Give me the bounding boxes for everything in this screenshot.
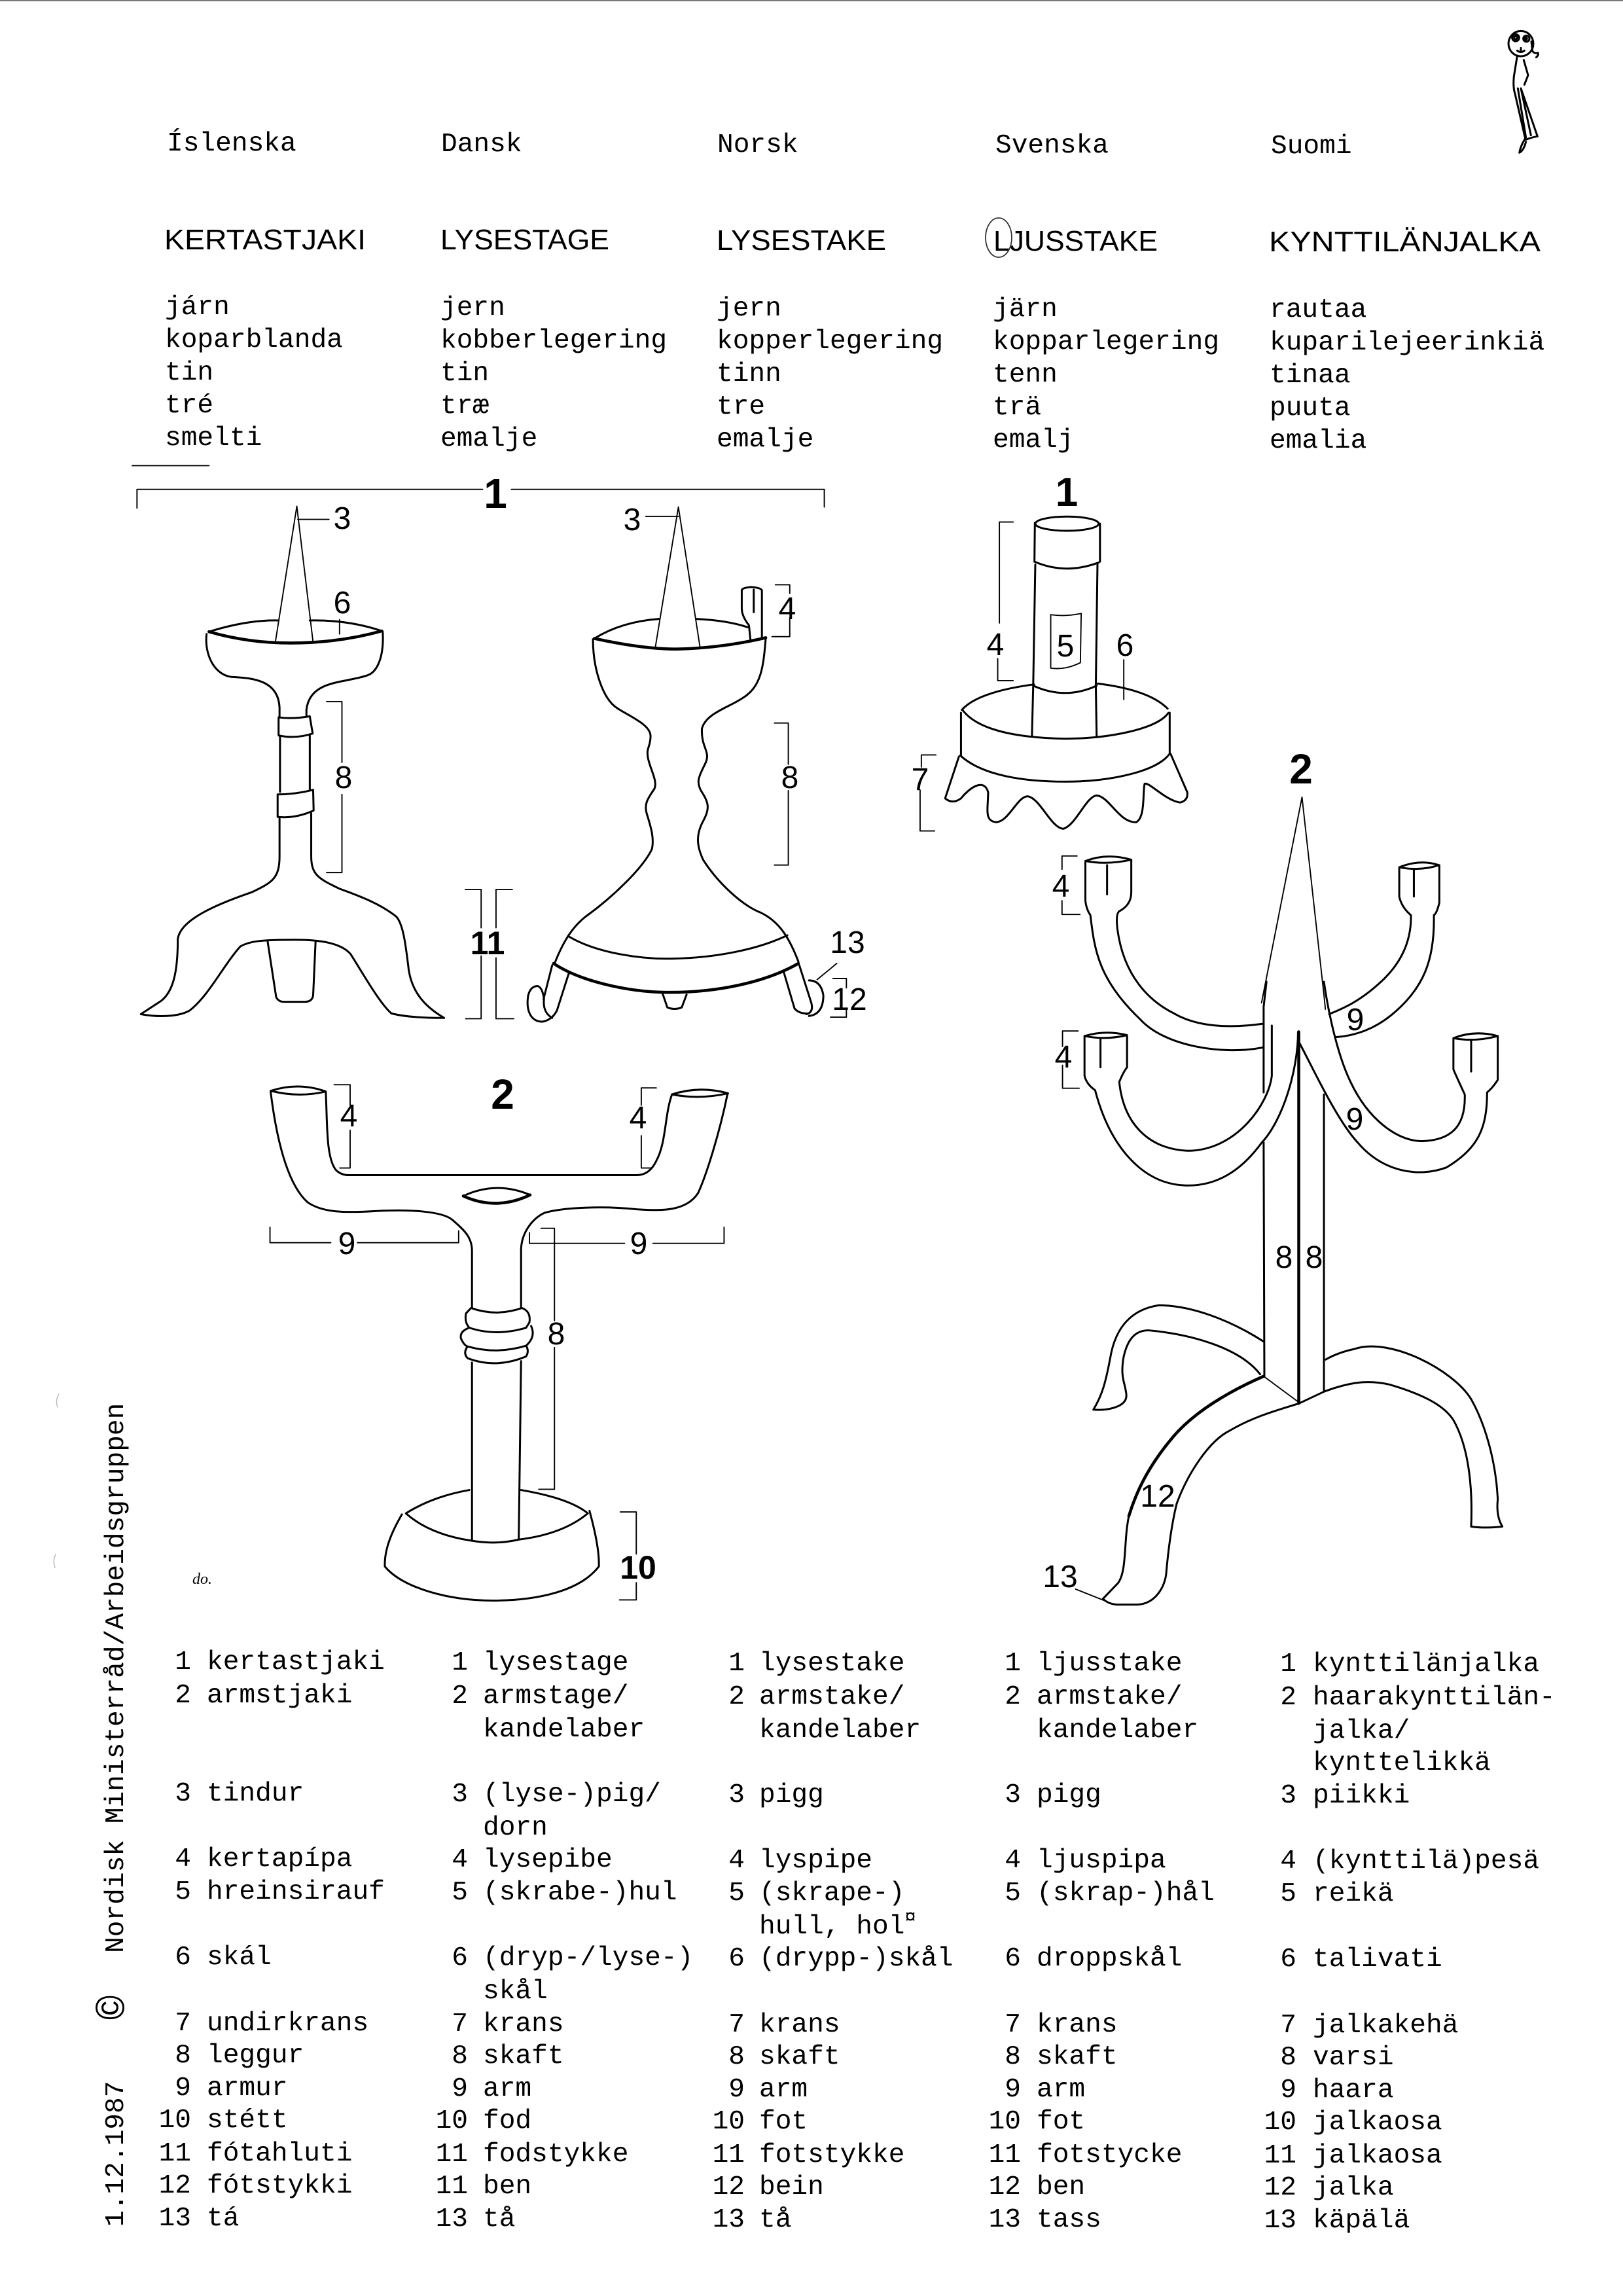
heading row: object names: LJUSSTAKE: [993, 225, 1158, 257]
glossary column: Norwegian: 10: [713, 2107, 745, 2137]
glossary column: Finnish: jalkaosa: [1313, 2108, 1442, 2138]
glossary column: Danish: skaft: [483, 2041, 564, 2072]
illustration: pricket candlesticks, figure 1 left: 3: [334, 501, 351, 536]
glossary column: Swedish: fot: [1037, 2107, 1085, 2137]
text block: materials Icelandic: koparblanda: [165, 325, 343, 355]
glossary column: Danish: lysepibe: [483, 1845, 613, 1875]
glossary column: Finnish: käpälä: [1313, 2206, 1410, 2236]
glossary column: Danish: (skrabe-)hul: [483, 1878, 677, 1908]
glossary column: Icelandic: 4: [175, 1844, 191, 1874]
heading row: object names: KERTASTJAKI: [164, 224, 366, 256]
glossary column: Norwegian: 3: [728, 1780, 745, 1810]
illustration: pricket candlestick with pipe, figure 1 middle: [527, 503, 867, 1022]
glossary column: Norwegian: arm: [759, 2075, 808, 2105]
glossary column: Finnish: 4: [1280, 1846, 1296, 1876]
glossary column: Finnish: 9: [1280, 2075, 1296, 2106]
glossary column: Finnish: 13: [1264, 2206, 1296, 2236]
glossary column: Icelandic: 2: [175, 1681, 191, 1711]
text block: materials Finnish: puuta: [1270, 393, 1351, 423]
glossary column: Finnish: 8: [1280, 2043, 1296, 2073]
text block: materials Finnish: kuparilejeerinkiä: [1270, 328, 1544, 358]
glossary column: Finnish: 11: [1264, 2141, 1296, 2171]
glossary column: Finnish: 12: [1264, 2173, 1296, 2203]
illustration: four-arm candelabrum, figure 2 right: 12: [1140, 1479, 1175, 1514]
vertical copyright note: [91, 1403, 137, 2227]
illustration: four-arm candelabrum, figure 2 right: 4: [1055, 1040, 1072, 1075]
glossary column: Swedish: (skrap-)hål: [1037, 1878, 1215, 1909]
glossary column: Finnish: jalka/: [1313, 1716, 1410, 1746]
glossary column: Finnish: varsi: [1313, 2043, 1394, 2073]
illustration: pricket candlesticks, figure 1 left: [132, 465, 825, 1018]
vertical copyright note: 1.12.1987: [101, 2081, 132, 2227]
text block: materials Danish: jern: [440, 293, 505, 323]
glossary column: Danish: 11: [436, 2172, 468, 2202]
glossary column: Danish: 10: [436, 2106, 468, 2136]
glossary column: Icelandic: [159, 1647, 385, 2234]
illustration: pricket candlestick with pipe, figure 1 middle: 13: [830, 925, 865, 960]
glossary column: Norwegian: ¤: [904, 1907, 916, 1929]
glossary column: Icelandic: fótstykki: [207, 2171, 352, 2201]
text block: materials Danish: tin: [440, 359, 489, 389]
text block: materials Danish: emalje: [440, 424, 537, 454]
text block: materials Norwegian: tinn: [717, 359, 781, 389]
illustration: pricket candlestick with pipe, figure 1 middle: 4: [779, 592, 796, 626]
text block: materials Swedish: tenn: [993, 360, 1058, 390]
glossary column: Danish: dorn: [483, 1813, 548, 1843]
illustration: four-arm candelabrum, figure 2 right: 8: [1275, 1240, 1293, 1275]
glossary column: Danish: fodstykke: [483, 2140, 628, 2170]
text block: materials Icelandic: smelti: [165, 423, 262, 454]
glossary column: Danish: 8: [452, 2041, 468, 2072]
heading row: language names: Norsk: [717, 130, 798, 160]
glossary column: Finnish: jalka: [1313, 2173, 1394, 2203]
glossary column: Icelandic: 12: [159, 2171, 191, 2201]
glossary column: Danish: fod: [483, 2106, 531, 2136]
glossary column: Norwegian: lyspipe: [759, 1846, 872, 1876]
glossary column: Danish: 1: [452, 1648, 468, 1678]
illustration: two-arm candelabrum, figure 2 left: 4: [630, 1101, 647, 1136]
glossary column: Danish: krans: [483, 2009, 564, 2039]
glossary column: Finnish: talivati: [1313, 1945, 1442, 1975]
illustration: two-arm candelabrum, figure 2 left: 10: [620, 1549, 656, 1586]
glossary column: Finnish: (kynttilä)pesä: [1313, 1846, 1539, 1876]
signature mark: do.: [192, 1571, 212, 1588]
glossary column: Finnish: 3: [1280, 1781, 1296, 1811]
glossary column: Norwegian: (skrape-): [759, 1878, 904, 1909]
glossary column: Swedish: tass: [1037, 2205, 1101, 2235]
glossary column: Finnish: 1: [1280, 1649, 1296, 1679]
glossary column: Swedish: ljuspipa: [1037, 1846, 1166, 1876]
illustration: pricket candlesticks, figure 1 left: 11: [471, 925, 505, 961]
glossary column: Finnish: haara: [1313, 2075, 1394, 2106]
illustration: socket candlestick, figure 1 right: 1: [1056, 470, 1078, 515]
heading row: object names: LYSESTAKE: [717, 224, 886, 257]
illustration: pricket candlesticks, figure 1 left: 8: [335, 761, 352, 795]
glossary column: Icelandic: 13: [159, 2204, 191, 2234]
heading row: object names: KYNTTILÄNJALKA: [1269, 226, 1541, 258]
glossary column: Danish: 4: [452, 1845, 468, 1875]
glossary column: Icelandic: kertastjaki: [207, 1647, 385, 1677]
glossary column: Danish: [436, 1648, 693, 2234]
glossary column: Swedish: fotstycke: [1037, 2140, 1182, 2170]
glossary column: Icelandic: hreinsirauf: [207, 1877, 385, 1907]
glossary column: Norwegian: 6: [728, 1944, 745, 1974]
glossary column: Icelandic: fótahluti: [207, 2139, 352, 2169]
illustration: socket candlestick, figure 1 right: 6: [1116, 628, 1133, 663]
icon: stick figure mascot: [1508, 31, 1538, 152]
glossary column: Swedish: 10: [989, 2107, 1021, 2137]
illustration: two-arm candelabrum, figure 2 left: [270, 1071, 728, 1600]
glossary column: Norwegian: fot: [759, 2107, 808, 2137]
glossary column: Finnish: kynttilänjalka: [1313, 1649, 1539, 1679]
heading row: language names: Íslenska: [167, 128, 296, 159]
glossary column: Swedish: skaft: [1037, 2042, 1118, 2072]
glossary column: Danish: 5: [452, 1878, 468, 1908]
glossary column: Icelandic: 11: [159, 2139, 191, 2169]
glossary column: Norwegian: 1: [728, 1649, 745, 1679]
glossary column: Norwegian: 4: [728, 1846, 745, 1876]
heading row: language names: Suomi: [1271, 132, 1352, 162]
glossary column: Icelandic: undirkrans: [207, 2009, 368, 2039]
illustration: two-arm candelabrum, figure 2 left: 9: [338, 1227, 355, 1261]
illustration: pricket candlesticks, figure 1 left: 1: [484, 470, 507, 517]
glossary column: Icelandic: 6: [175, 1943, 191, 1973]
glossary column: Norwegian: 2: [728, 1682, 745, 1712]
glossary column: Finnish: jalkaosa: [1313, 2141, 1442, 2171]
glossary column: Finnish: 7: [1280, 2011, 1296, 2041]
glossary column: Swedish: 3: [1005, 1780, 1021, 1810]
glossary column: Norwegian: kandelaber: [759, 1715, 921, 1746]
glossary column: Danish: 13: [436, 2204, 468, 2234]
glossary column: Icelandic: 9: [175, 2073, 191, 2104]
glossary column: Swedish: 2: [1005, 1682, 1021, 1712]
illustration: four-arm candelabrum, figure 2 right: 9: [1346, 1102, 1363, 1137]
illustration: four-arm candelabrum, figure 2 right: 4: [1052, 869, 1069, 904]
text block: materials Norwegian: kopperlegering: [717, 327, 943, 357]
glossary column: Finnish: piikki: [1313, 1781, 1410, 1811]
text block: materials Danish: kobberlegering: [440, 326, 667, 356]
glossary column: Finnish: jalkakehä: [1313, 2011, 1458, 2041]
illustration: two-arm candelabrum, figure 2 left: 4: [340, 1099, 357, 1134]
text block: materials Swedish: [993, 295, 1219, 456]
glossary column: Danish: kandelaber: [483, 1715, 645, 1745]
glossary column: Swedish: 5: [1005, 1878, 1021, 1909]
illustration: socket candlestick, figure 1 right: 5: [1057, 629, 1074, 664]
illustration: four-arm candelabrum, figure 2 right: 8: [1306, 1240, 1323, 1275]
glossary column: Danish: armstage/: [483, 1681, 628, 1712]
glossary column: Norwegian: 7: [728, 2010, 745, 2040]
glossary column: Swedish: 1: [1005, 1649, 1021, 1679]
text block: materials Icelandic: [165, 293, 343, 454]
text block: materials Finnish: [1270, 295, 1544, 456]
glossary column: Swedish: 7: [1005, 2010, 1021, 2040]
glossary column: Swedish: 12: [989, 2172, 1021, 2202]
glossary column: Finnish: 2: [1280, 1683, 1296, 1713]
glossary column: Swedish: armstake/: [1037, 1682, 1182, 1712]
text block: materials Swedish: järn: [993, 295, 1058, 325]
glossary column: Icelandic: kertapípa: [207, 1844, 352, 1874]
vertical copyright note: Nordisk Ministerråd/Arbeidsgruppen: [101, 1403, 132, 1953]
glossary column: Icelandic: stétt: [207, 2106, 288, 2136]
text block: materials Norwegian: [717, 294, 943, 455]
glossary column: Danish: 3: [452, 1780, 468, 1810]
glossary column: Icelandic: skál: [207, 1943, 272, 1973]
illustration: two-arm candelabrum, figure 2 left: 9: [630, 1227, 647, 1261]
glossary column: Danish: skål: [483, 1977, 548, 2007]
glossary column: Norwegian: fotstykke: [759, 2140, 904, 2170]
heading row: language names: Svenska: [995, 131, 1109, 161]
illustration: two-arm candelabrum, figure 2 left: 8: [548, 1317, 565, 1352]
glossary column: Swedish: 4: [1005, 1846, 1021, 1876]
illustration: pricket candlestick with pipe, figure 1 middle: 3: [624, 503, 641, 537]
illustration: socket candlestick, figure 1 right: 4: [987, 628, 1004, 662]
heading row: language names: [167, 128, 1352, 162]
glossary column: Norwegian: hull, hol: [759, 1912, 904, 1942]
glossary column: Swedish: arm: [1037, 2075, 1085, 2105]
glossary column: Finnish: reikä: [1313, 1879, 1394, 1909]
heading row: object names: LYSESTAGE: [440, 224, 609, 256]
glossary column: Icelandic: 5: [175, 1877, 191, 1907]
glossary column: Swedish: krans: [1037, 2010, 1118, 2040]
glossary column: Danish: (dryp-/lyse-): [483, 1943, 693, 1973]
vertical copyright note: ©: [91, 1996, 137, 2020]
glossary column: Danish: (lyse-)pig/: [483, 1780, 661, 1810]
illustration: pricket candlestick with pipe, figure 1 middle: 12: [832, 982, 867, 1017]
text block: materials Icelandic: tré: [165, 391, 213, 421]
glossary column: Norwegian: lysestake: [759, 1649, 904, 1679]
glossary column: Finnish: kynttelikkä: [1313, 1748, 1491, 1778]
glossary column: Icelandic: armur: [207, 2073, 288, 2104]
glossary column: Finnish: [1264, 1649, 1556, 2236]
glossary column: Icelandic: tindur: [207, 1779, 304, 1809]
heading row: object names: [164, 218, 1541, 258]
glossary column: Finnish: 6: [1280, 1945, 1296, 1975]
glossary column: Swedish: ljusstake: [1037, 1649, 1182, 1679]
text block: materials Finnish: rautaa: [1270, 295, 1366, 325]
illustration: four-arm candelabrum, figure 2 right: 9: [1347, 1003, 1364, 1037]
glossary column: Danish: 9: [452, 2074, 468, 2104]
text block: materials Finnish: tinaa: [1270, 361, 1351, 391]
glossary column: Norwegian: 8: [728, 2042, 745, 2072]
text block: materials Danish: træ: [440, 391, 489, 422]
glossary column: Norwegian: tå: [759, 2205, 791, 2235]
illustration: pricket candlestick with pipe, figure 1 middle: 8: [781, 761, 798, 795]
glossary column: Icelandic: 8: [175, 2041, 191, 2071]
glossary column: Danish: tå: [483, 2204, 515, 2234]
glossary column: Swedish: pigg: [1037, 1780, 1101, 1810]
glossary column: Danish: 7: [452, 2009, 468, 2039]
illustration: four-arm candelabrum, figure 2 right: 2: [1289, 745, 1313, 793]
glossary column: Norwegian: bein: [759, 2172, 824, 2202]
heading row: language names: Dansk: [441, 130, 522, 160]
glossary column: Swedish: 6: [1005, 1944, 1021, 1974]
glossary column: Swedish: 11: [989, 2140, 1021, 2170]
illustration: socket candlestick, figure 1 right: 7: [912, 762, 929, 797]
glossary column: Icelandic: 10: [159, 2106, 191, 2136]
glossary column: Finnish: haarakynttilän-: [1313, 1683, 1556, 1713]
glossary column: Danish: 11: [436, 2140, 468, 2170]
glossary column: Danish: 2: [452, 1681, 468, 1712]
glossary column: Norwegian: skaft: [759, 2042, 840, 2072]
text block: materials Icelandic: járn: [165, 293, 230, 323]
text block: materials Norwegian: emalje: [717, 425, 813, 455]
glossary column: Icelandic: 3: [175, 1779, 191, 1809]
illustration: two-arm candelabrum, figure 2 left: 2: [491, 1071, 514, 1118]
glossary column: Swedish: [989, 1649, 1215, 2235]
glossary column: Danish: lysestage: [483, 1648, 628, 1678]
illustration: socket candlestick, figure 1 right: [912, 470, 1187, 831]
glossary column: Norwegian: 11: [713, 2140, 745, 2170]
glossary column: Icelandic: 7: [175, 2009, 191, 2039]
glossary column: Swedish: ben: [1037, 2172, 1085, 2202]
text block: materials Norwegian: jern: [717, 294, 781, 324]
glossary column: Norwegian: armstake/: [759, 1682, 904, 1712]
glossary column: Norwegian: 5: [728, 1878, 745, 1909]
text block: materials Swedish: kopparlegering: [993, 327, 1219, 357]
text block: materials Swedish: emalj: [993, 425, 1074, 456]
illustration: four-arm candelabrum, figure 2 right: [1043, 745, 1503, 1605]
text block: materials Swedish: trä: [993, 393, 1041, 423]
text block: materials Norwegian: tre: [717, 392, 765, 422]
glossary column: Icelandic: leggur: [207, 2041, 304, 2071]
glossary column: Finnish: 10: [1264, 2108, 1296, 2138]
glossary column: Icelandic: tá: [207, 2204, 239, 2234]
glossary column: Norwegian: [713, 1649, 954, 2235]
glossary column: Norwegian: 9: [728, 2075, 745, 2105]
glossary column: Danish: arm: [483, 2074, 531, 2104]
glossary column: Swedish: 8: [1005, 2042, 1021, 2072]
glossary column: Danish: 6: [452, 1943, 468, 1973]
glossary column: Norwegian: pigg: [759, 1780, 824, 1810]
glossary column: Icelandic: armstjaki: [207, 1681, 352, 1711]
text block: materials Icelandic: tin: [165, 358, 213, 388]
glossary column: Norwegian: krans: [759, 2010, 840, 2040]
illustration: pricket candlesticks, figure 1 left: 6: [334, 586, 351, 620]
glossary column: Swedish: kandelaber: [1037, 1715, 1198, 1746]
glossary column: Danish: ben: [483, 2172, 531, 2202]
text block: materials Finnish: emalia: [1270, 426, 1366, 456]
glossary column: Norwegian: 13: [713, 2205, 745, 2235]
illustration: four-arm candelabrum, figure 2 right: 13: [1043, 1560, 1078, 1594]
glossary column: Swedish: 13: [989, 2205, 1021, 2235]
glossary column: Icelandic: 1: [175, 1647, 191, 1677]
glossary column: Norwegian: 12: [713, 2172, 745, 2202]
glossary column: Swedish: 9: [1005, 2075, 1021, 2105]
text block: materials Danish: [440, 293, 667, 454]
glossary column: Finnish: 5: [1280, 1879, 1296, 1909]
glossary column: Norwegian: (drypp-)skål: [759, 1944, 954, 1974]
glossary column: Swedish: droppskål: [1037, 1944, 1182, 1974]
